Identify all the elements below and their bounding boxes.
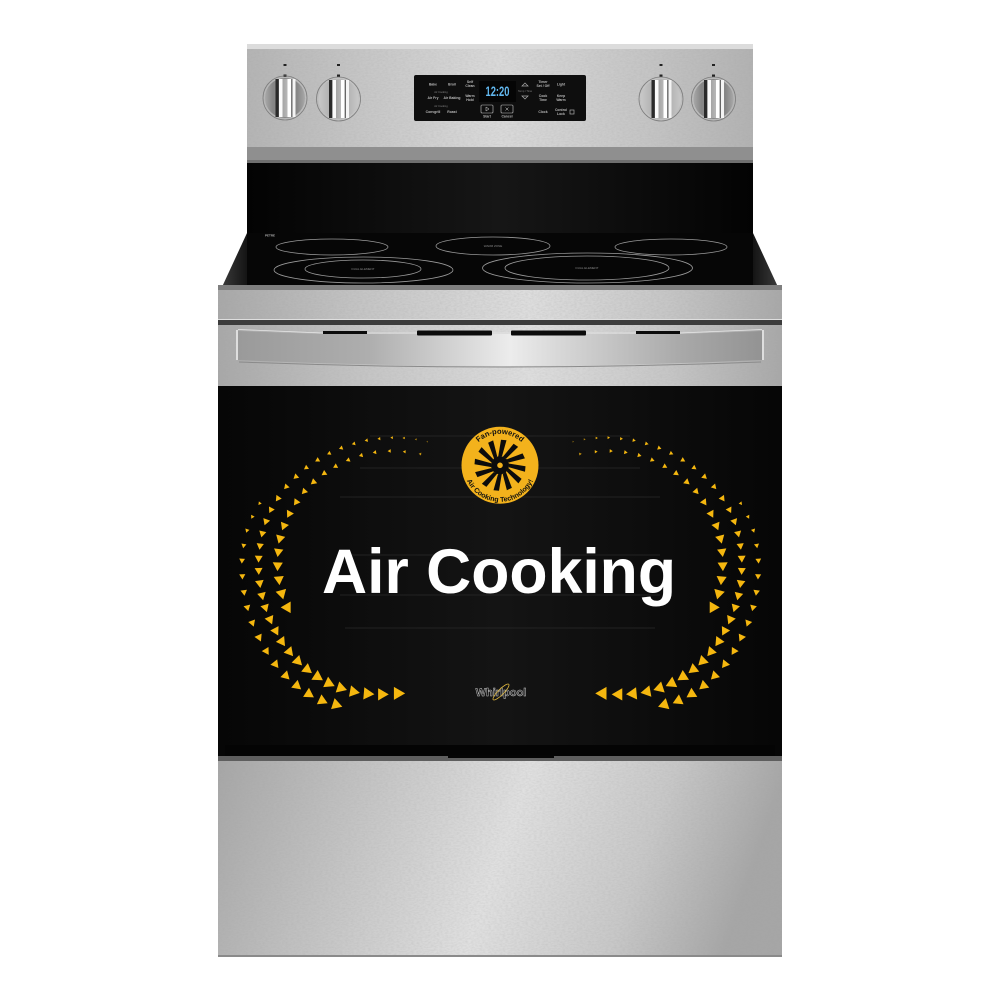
button labels: Set / Off — [536, 84, 550, 88]
panel: oven control display — [414, 75, 586, 121]
button labels: Warm — [465, 94, 475, 98]
burner: back left — [276, 239, 388, 255]
button labels: Lock — [557, 112, 565, 116]
button labels: Hold — [466, 98, 474, 102]
arrows: right air swirl — [573, 436, 762, 712]
logo: Whirlpool: Whirlpool — [476, 687, 526, 699]
button labels: Temp / Time — [518, 89, 533, 93]
button labels: Timer — [538, 80, 548, 84]
button labels: Convgrill — [426, 110, 440, 114]
panel: door handle — [218, 325, 782, 386]
clock display — [479, 81, 516, 102]
button labels: Air Cooking — [434, 104, 448, 108]
burner: front left — [274, 257, 453, 283]
badge text — [466, 430, 533, 504]
button labels: Cook — [539, 94, 547, 98]
button labels: Warm — [556, 98, 566, 102]
badge text: Air Cooking Technology! — [466, 479, 533, 504]
start and cancel buttons: Start — [483, 114, 492, 118]
button labels: Keep — [557, 94, 565, 98]
burner: front right: DUAL ELEMENT — [576, 266, 599, 270]
button labels: Bake — [429, 82, 437, 86]
burner: back center — [436, 237, 550, 255]
button labels — [426, 80, 567, 116]
button labels: Light — [557, 82, 566, 86]
panel: control console — [247, 44, 753, 163]
button labels: Clock — [538, 110, 548, 114]
start and cancel buttons — [481, 105, 513, 118]
button labels: Roast — [447, 110, 458, 114]
panel: backsplash glass — [247, 163, 753, 233]
badge: fan-powered air cooking technology — [462, 426, 538, 504]
badge text: Fan-powered — [476, 430, 525, 442]
panel: lower drawer — [218, 755, 782, 957]
handle slots — [323, 330, 680, 336]
clock display: 12:20 — [486, 83, 510, 99]
button labels: Self — [467, 80, 474, 84]
icon: knob markings — [284, 64, 715, 77]
panel: front steel strip — [218, 285, 782, 325]
panel: cooktop — [222, 233, 778, 287]
button labels: Time — [539, 98, 547, 102]
cooktop model label: PETRE — [265, 234, 275, 238]
logo: Whirlpool — [476, 682, 526, 702]
temperature arrows — [522, 83, 574, 114]
title: Air Cooking: Air Cooking — [322, 537, 676, 607]
button labels: Clean — [465, 84, 475, 88]
icon: fan — [474, 440, 526, 491]
icon: knob right rear — [692, 77, 736, 121]
arrows: left air swirl — [239, 436, 428, 712]
burner: front left: DUAL ELEMENT — [352, 267, 375, 271]
start and cancel buttons: Cancel — [501, 114, 513, 118]
button labels: Air Fry — [428, 96, 439, 100]
burner: back center: WARM ZONE — [484, 244, 502, 248]
button labels: Air Baking — [444, 96, 460, 100]
burner: front right — [482, 253, 692, 283]
panel: oven door — [218, 386, 782, 757]
button labels: Broil — [448, 82, 456, 86]
icon: knob right front — [639, 77, 683, 121]
button labels: Control — [555, 108, 567, 112]
icon: knob left rear — [263, 76, 307, 120]
button labels: Air Cooking — [434, 90, 448, 94]
burner: back right — [615, 239, 727, 255]
icon: knob left front — [316, 77, 360, 121]
